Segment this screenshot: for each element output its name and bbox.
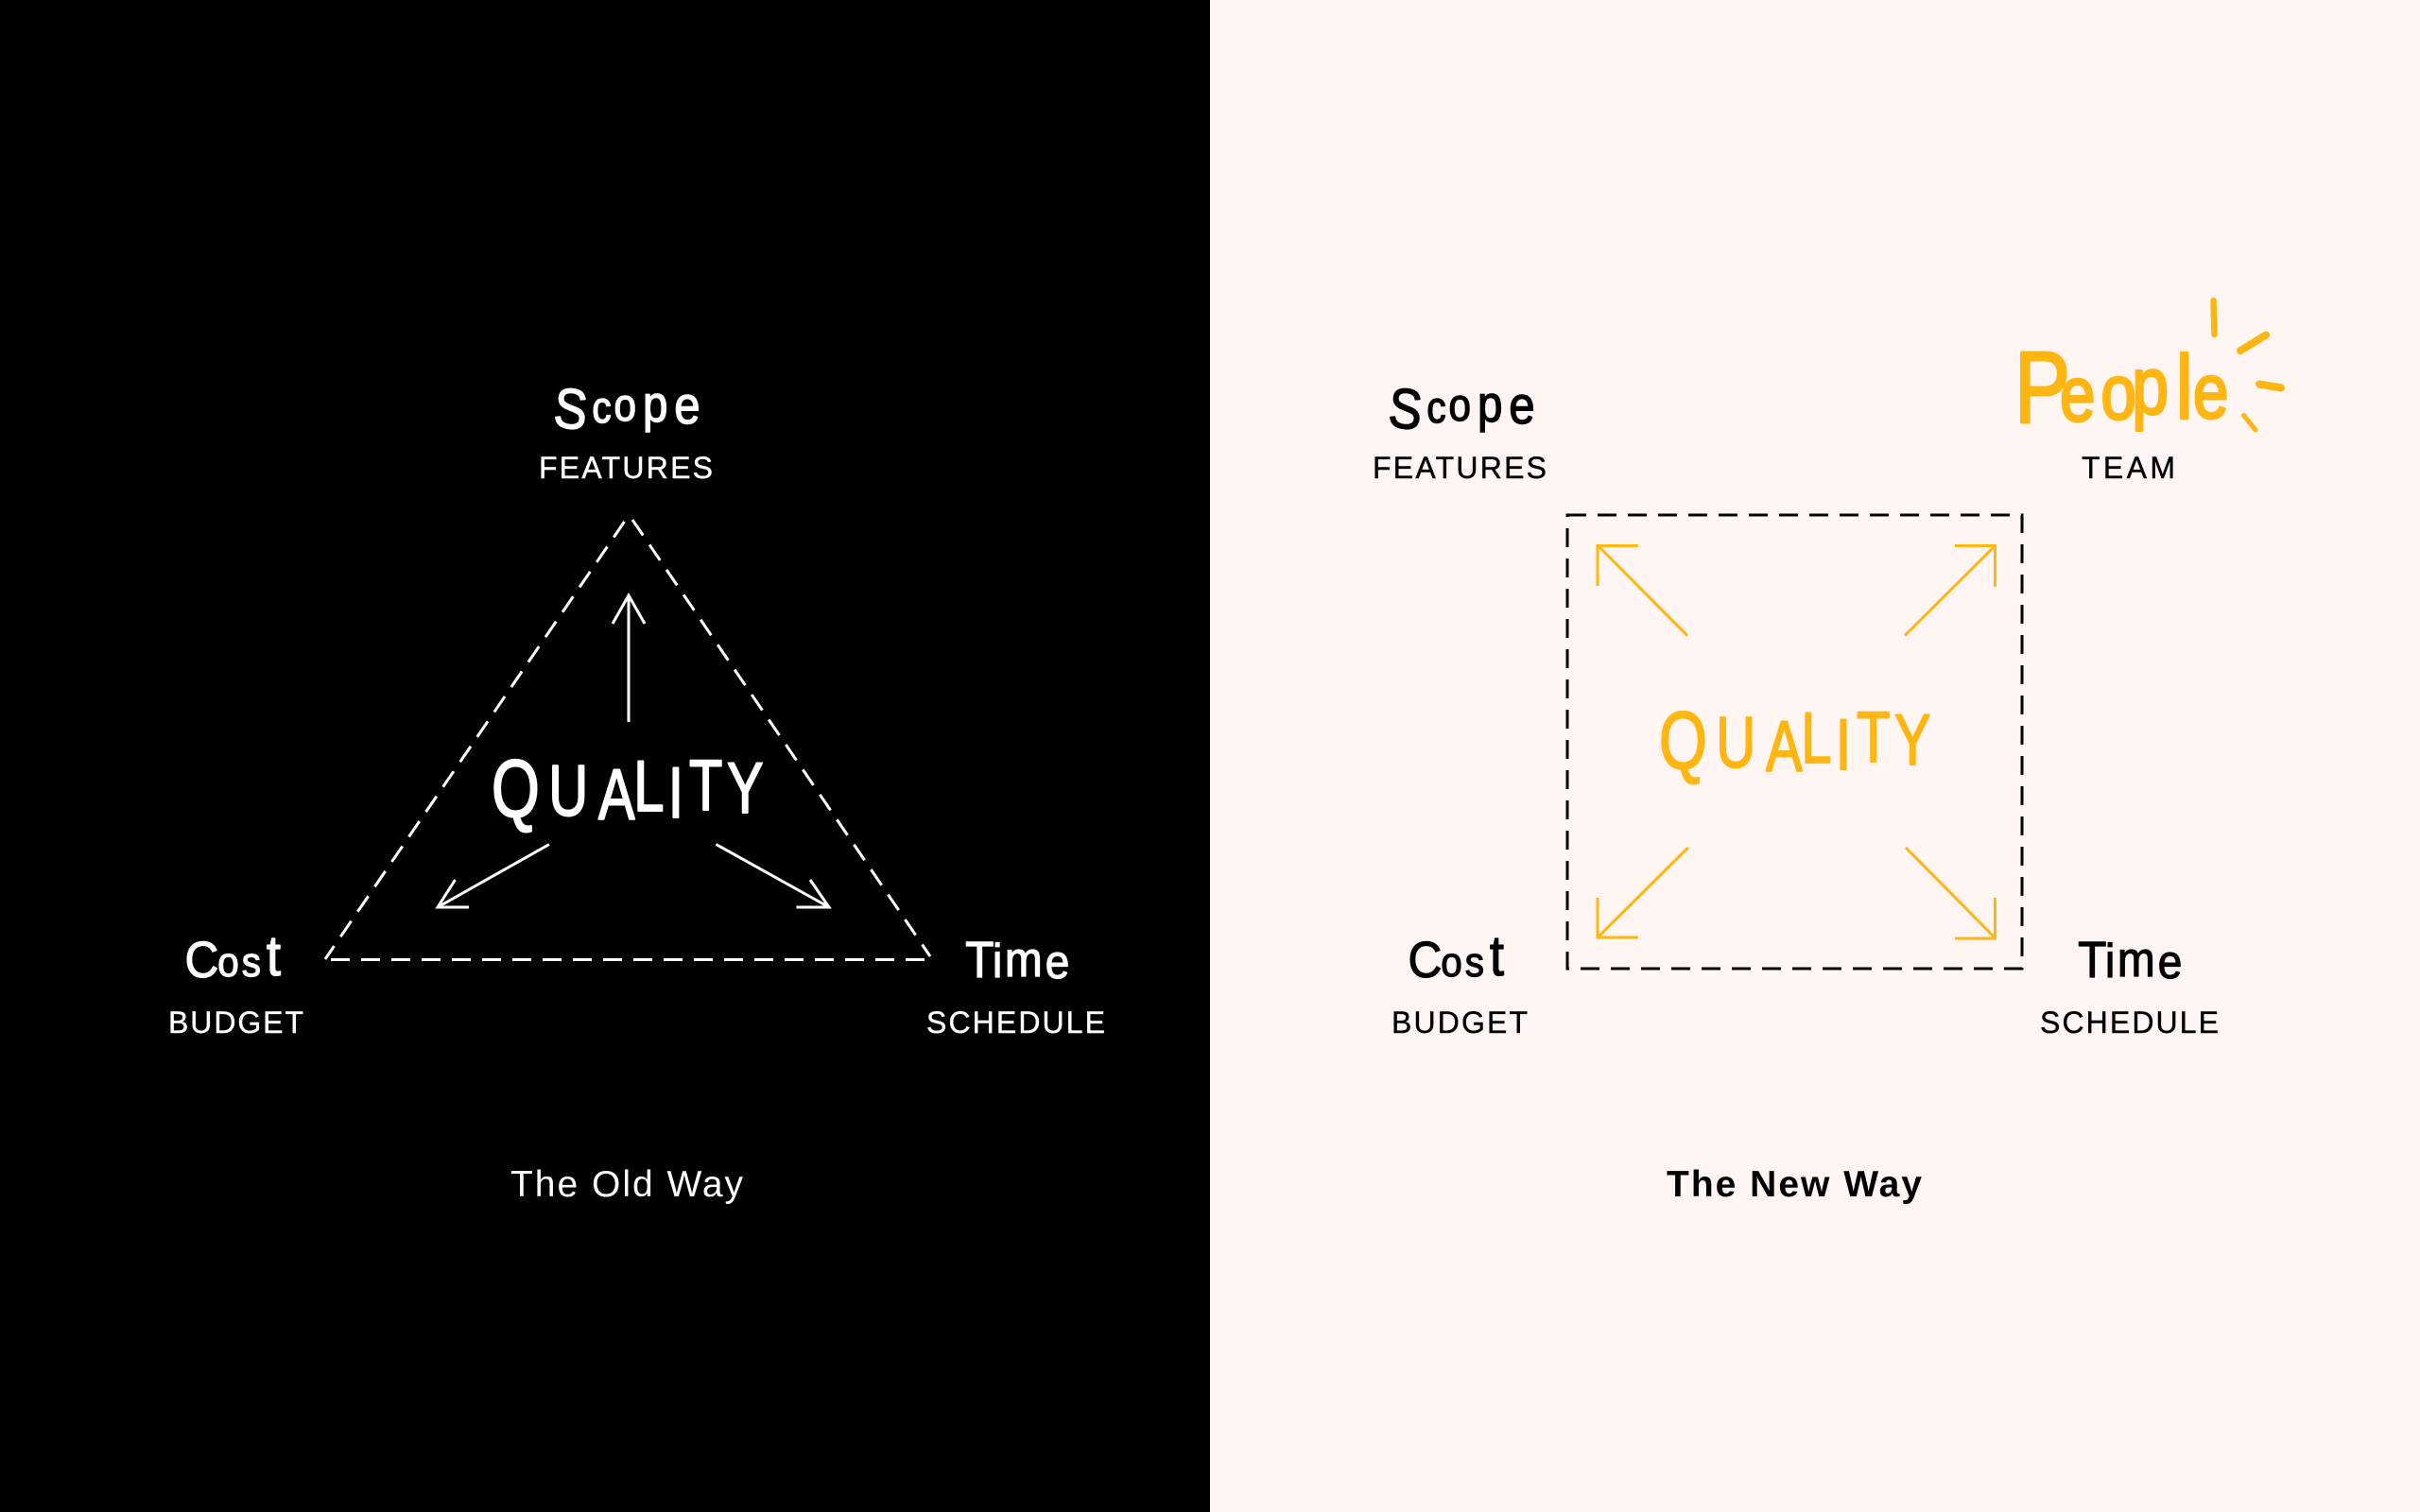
text: QUALITY: QUALITY [492,744,764,835]
dashed triangle [325,520,930,960]
heading: Time: Time [965,931,1069,988]
dashed square [1567,515,2022,969]
arrow: up to scope [613,595,645,722]
heading: People with sun rays [2014,301,2281,444]
arrow: down-left [1598,848,1688,937]
label: BUDGET: BUDGET [1392,1005,1528,1040]
caption: The Old Way: The Old Way [510,1164,743,1205]
heading: Cost: Cost [1409,925,1504,988]
heading: Cost: Cost [185,925,281,988]
text: QUALITY: QUALITY [1659,696,1931,787]
panel: the old way [0,0,1210,1512]
heading: Scope: Scope [551,375,700,442]
icon: sun rays [2214,301,2281,430]
label: FEATURES: FEATURES [1373,451,1547,485]
label: BUDGET: BUDGET [168,1005,303,1040]
heading: Scope: Scope [1386,375,1535,442]
heading: People with sun rays: People [2014,331,2228,444]
label: TEAM: TEAM [2082,451,2175,485]
arrow: down-right [1906,848,1995,938]
heading: Time: Time [2078,931,2182,988]
label: FEATURES: FEATURES [539,451,713,485]
panel: the new way [1210,0,2420,1512]
arrow: up-right [1905,546,1995,636]
arrow: down-left to cost [438,845,549,907]
label: SCHEDULE: SCHEDULE [2040,1005,2219,1040]
caption: The New Way: The New Way [1667,1164,1922,1205]
arrow: down-right to time [717,845,829,907]
arrow: up-left [1598,546,1687,636]
label: SCHEDULE: SCHEDULE [926,1005,1105,1040]
